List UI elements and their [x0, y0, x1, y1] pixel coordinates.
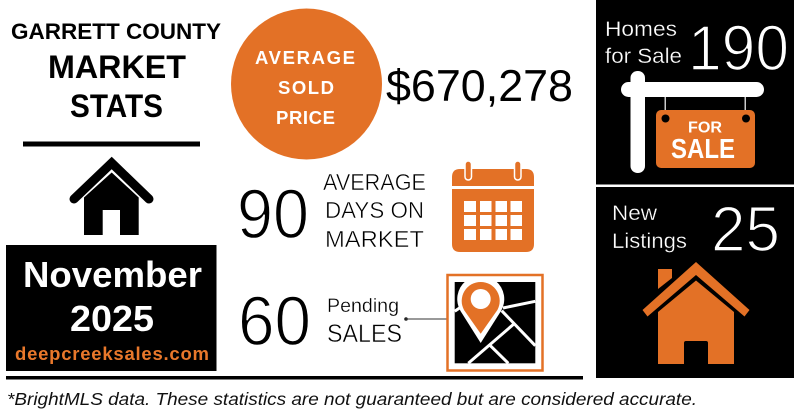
date panel: November	[23, 254, 202, 295]
average sold price badge	[231, 8, 382, 160]
days on market value: 90	[237, 175, 309, 253]
panel: homes for sale	[596, 0, 794, 184]
icon: for sale sign: FOR	[688, 120, 722, 136]
pending sales value: 60	[238, 282, 311, 360]
icon: calendar	[452, 161, 534, 252]
panel: new listings: Listings	[612, 229, 687, 253]
average sold price badge: SOLD	[278, 77, 334, 98]
icon: for sale sign	[621, 71, 764, 173]
icon: black house	[74, 163, 149, 235]
average sold price badge: AVERAGE	[255, 47, 355, 68]
pending sales label	[327, 296, 402, 348]
days on market label: MARKET	[325, 226, 424, 252]
panel: homes for sale: 190	[688, 12, 789, 84]
title	[11, 19, 221, 124]
title: GARRETT COUNTY	[11, 19, 221, 44]
connector line	[404, 317, 447, 321]
panel: homes for sale: for Sale	[605, 44, 682, 68]
date panel: 2025	[70, 298, 154, 339]
icon: map with pin	[448, 275, 542, 370]
icon: orange house	[642, 262, 750, 364]
days on market label: AVERAGE	[323, 169, 426, 195]
title: MARKET	[48, 49, 186, 85]
footnote: *BrightMLS data. These statistics are not guaranteed but are considered accurate.	[7, 389, 697, 409]
days on market label	[323, 169, 426, 252]
panel: new listings: New	[612, 201, 657, 225]
title divider	[23, 142, 200, 146]
days on market label: DAYS ON	[325, 197, 424, 223]
average sold price badge: PRICE	[276, 107, 335, 128]
bottom divider	[6, 376, 583, 380]
icon: for sale sign: SALE	[671, 133, 735, 164]
panel: homes for sale: Homes	[605, 17, 677, 41]
pending sales label: SALES	[327, 320, 402, 348]
date panel: deepcreeksales.com	[15, 343, 209, 364]
average sold price value: $670,278	[386, 62, 573, 111]
title: STATS	[70, 88, 163, 124]
panel: new listings	[596, 187, 794, 378]
panel: new listings: 25	[711, 193, 780, 265]
date panel	[6, 245, 216, 371]
pending sales label: Pending	[327, 296, 399, 317]
